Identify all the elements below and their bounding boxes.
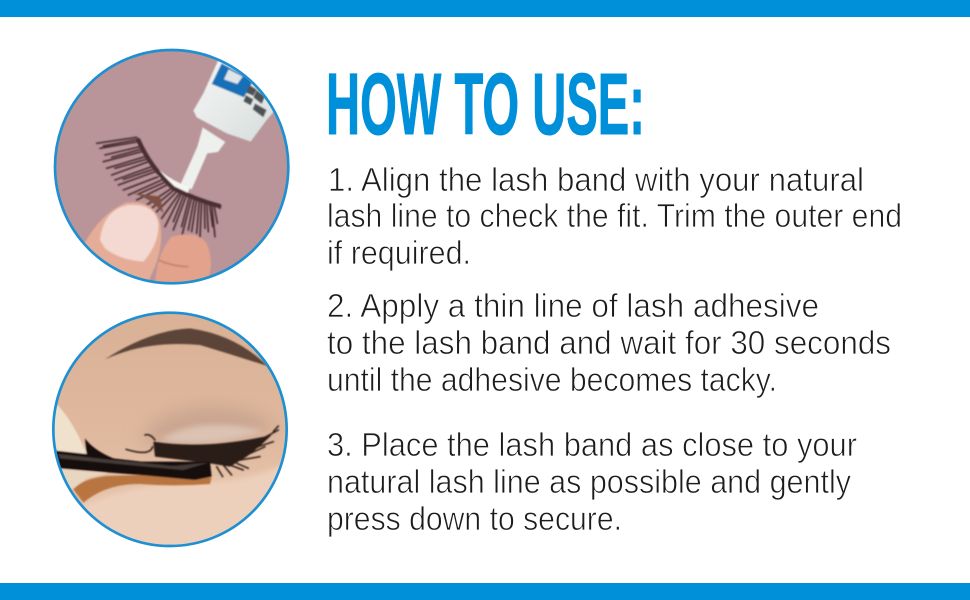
photo: lash placed on eyelid with applicator xyxy=(52,311,288,548)
step 3 text xyxy=(327,426,857,537)
step 1 text xyxy=(327,161,902,271)
step 2 text: until the adhesive becomes tacky. xyxy=(327,361,777,398)
step 1 text: 1. Align the lash band with your natural xyxy=(328,161,864,198)
step 1 text: if required. xyxy=(327,234,471,271)
photo: glue applied to lash band xyxy=(54,48,290,285)
top bar xyxy=(0,0,970,17)
step 3 text: 3. Place the lash band as close to your xyxy=(327,426,857,463)
step 2 text: 2. Apply a thin line of lash adhesive xyxy=(327,287,819,324)
step 3 text: natural lash line as possible and gently xyxy=(327,463,851,500)
step 2 text xyxy=(327,287,891,398)
bottom bar xyxy=(0,583,970,600)
step 2 text: to the lash band and wait for 30 seconds xyxy=(327,324,891,361)
step 3 text: press down to secure. xyxy=(327,500,622,537)
heading: HOW TO USE: xyxy=(326,56,645,153)
step 1 text: lash line to check the fit. Trim the outer end xyxy=(327,197,902,234)
